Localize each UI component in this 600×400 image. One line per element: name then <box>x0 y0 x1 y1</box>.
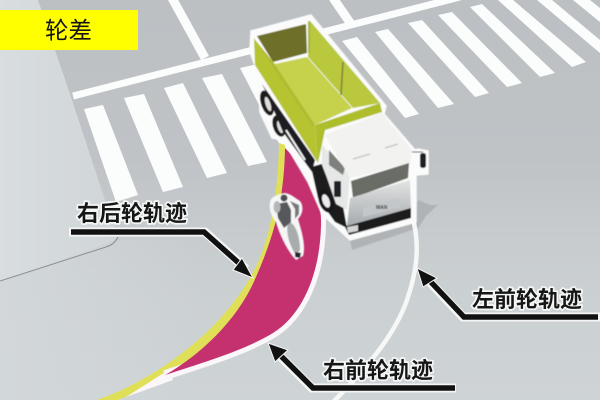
rider arm <box>290 201 299 219</box>
front wheel <box>315 187 337 215</box>
crosswalk left group <box>84 64 300 202</box>
leader line <box>279 354 455 388</box>
lane line right <box>333 0 351 24</box>
black wheel arch <box>311 163 347 228</box>
chassis <box>262 84 315 172</box>
chassis white stripe <box>286 130 305 160</box>
inner wheel difference area <box>165 148 321 375</box>
stop line <box>73 0 460 96</box>
crosswalk right group <box>342 0 600 118</box>
roof panels <box>353 144 398 159</box>
arrowhead <box>233 258 253 278</box>
lane line left <box>172 0 205 58</box>
leader line <box>429 280 598 317</box>
cab side <box>322 145 350 210</box>
rear wheel track: yellow <box>97 143 286 400</box>
leader line <box>71 232 241 265</box>
front wheel <box>295 252 301 258</box>
right mirror head <box>420 153 426 168</box>
bed left wall <box>254 38 318 163</box>
bed right wall <box>308 21 380 108</box>
white track tail <box>126 369 173 397</box>
label text: 右前轮轨迹 <box>323 358 433 383</box>
grille panel <box>363 198 400 217</box>
rider backpack <box>274 201 280 213</box>
label text: 右后轮轨迹 <box>77 201 187 226</box>
bed front rim <box>315 103 382 163</box>
callout: right front wheel track <box>268 343 456 388</box>
cab side window <box>329 150 345 175</box>
road markings <box>73 0 600 202</box>
leader outline <box>276 352 456 388</box>
cab front <box>347 180 411 226</box>
motorcycle body <box>287 222 300 255</box>
truck shadow <box>350 200 438 250</box>
rider head <box>280 194 288 202</box>
inner left wall <box>255 40 315 127</box>
windshield <box>351 163 409 198</box>
truck white outline <box>250 15 428 240</box>
title banner: 轮差 <box>45 18 92 44</box>
rider body <box>276 202 291 228</box>
left front wheel track <box>333 215 417 400</box>
arrowhead <box>268 343 288 362</box>
rider outline <box>270 193 304 260</box>
callout: left front wheel track <box>417 268 600 317</box>
sidewalk corner <box>0 0 118 282</box>
dump truck <box>250 15 428 240</box>
callout: right rear wheel track <box>69 201 253 278</box>
leader outline <box>69 232 246 269</box>
arrowhead <box>417 268 437 287</box>
grille logo: MAN <box>376 205 388 211</box>
right mirror arm <box>412 151 423 153</box>
bed back wall <box>257 24 307 62</box>
left mirror <box>334 181 341 197</box>
leader outline <box>426 278 600 317</box>
motorcycle rider <box>270 193 304 260</box>
headlight <box>347 225 358 233</box>
lower left road lightening <box>0 240 200 400</box>
corner post <box>308 21 310 53</box>
right wall pole <box>341 62 343 95</box>
right front wheel track: white edge <box>165 150 321 375</box>
bumper <box>338 208 411 235</box>
bed floor <box>257 42 352 125</box>
cab roof <box>325 113 412 178</box>
label text: 左前轮轨迹 <box>472 287 582 312</box>
title banner <box>0 10 138 50</box>
rear wheels <box>257 89 288 138</box>
curb line <box>0 237 118 281</box>
